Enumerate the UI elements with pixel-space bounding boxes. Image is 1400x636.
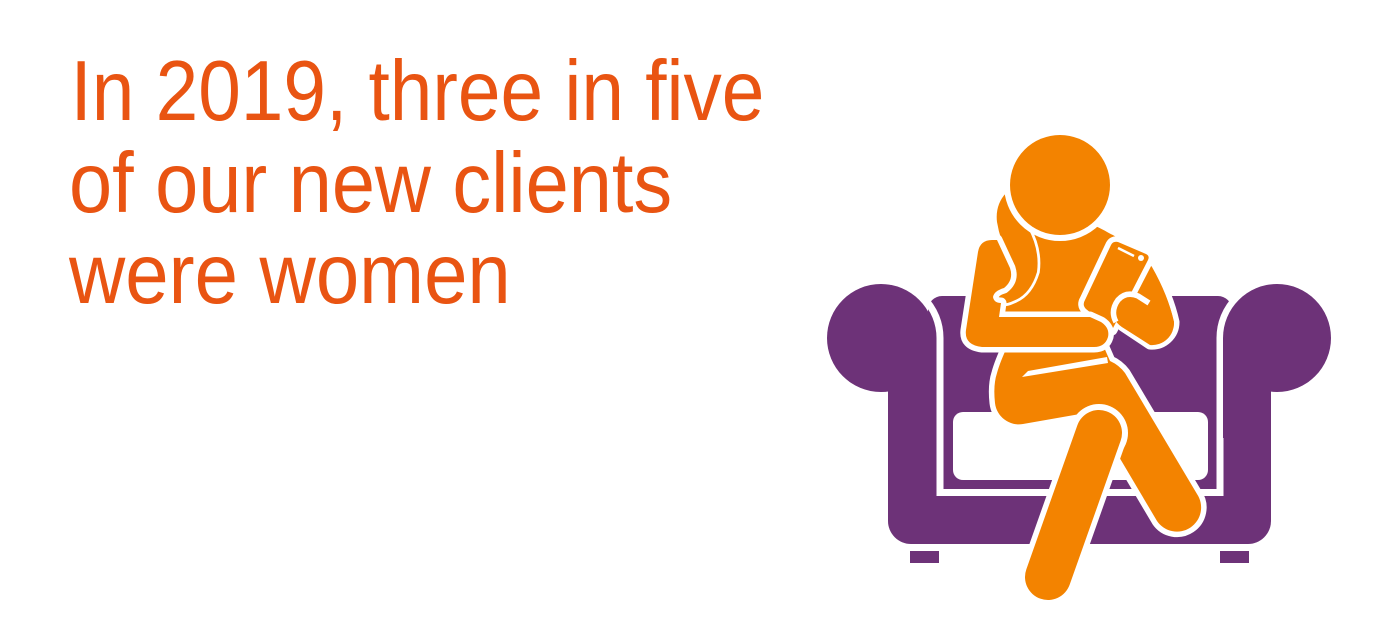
title [68, 44, 764, 322]
woman [966, 135, 1201, 577]
front leg [1048, 433, 1099, 577]
title: of our new clients [69, 136, 672, 231]
icon: woman on armchair [827, 135, 1331, 577]
phone [1084, 242, 1149, 330]
hair [994, 193, 1038, 304]
armchair [827, 281, 1331, 563]
right arm [1115, 237, 1174, 344]
waist fold [1022, 357, 1108, 377]
torso [1000, 225, 1125, 318]
back leg and hips [994, 345, 1201, 532]
folded arm [966, 240, 1108, 347]
title: In 2019, three in five [70, 44, 764, 139]
hand [1113, 290, 1174, 345]
head [1010, 135, 1110, 235]
title: were women [68, 227, 511, 322]
